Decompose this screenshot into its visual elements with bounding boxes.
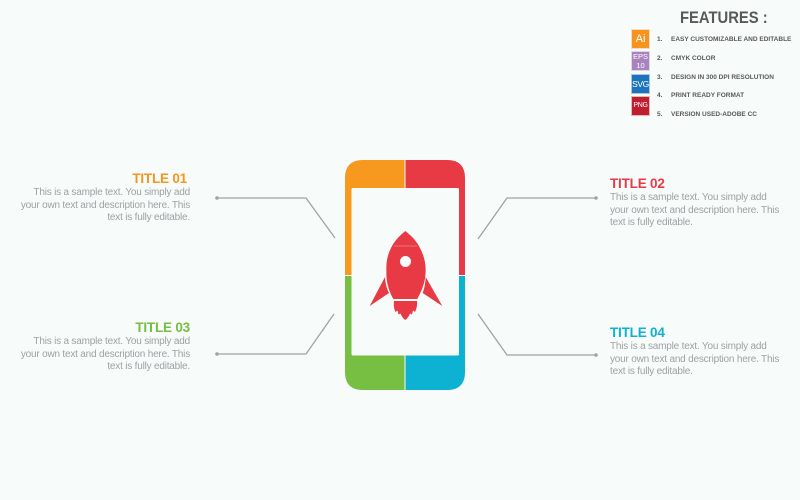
phone segment: red <box>406 160 465 275</box>
phone screen <box>352 188 459 356</box>
description 04: text is fully editable. <box>610 366 693 377</box>
feature 2: 2. <box>657 55 662 62</box>
description 02 <box>610 192 779 228</box>
description 01 <box>21 187 190 223</box>
description 03: your own text and description here. This <box>21 348 190 360</box>
description 01: This is a sample text. You simply add <box>33 187 190 198</box>
description 01: your own text and description here. This <box>21 200 190 210</box>
rocket window <box>400 256 411 267</box>
features heading: FEATURES : <box>680 8 768 27</box>
rocket right fin <box>423 277 442 306</box>
title 04: TITLE 04 <box>610 325 665 340</box>
phone segment: blue <box>406 276 465 390</box>
description 02: This is a sample text. You simply add <box>610 192 767 203</box>
description 03 <box>21 336 190 372</box>
icon: PNG format: PNG <box>633 102 648 109</box>
feature 4: PRINT READY FORMAT <box>671 92 744 99</box>
rocket left fin <box>370 277 389 306</box>
description 03: This is a sample text. You simply add <box>33 336 190 347</box>
feature 3: 3. <box>657 74 662 81</box>
icon: SVG format <box>631 74 650 94</box>
title 02: TITLE 02 <box>610 176 665 191</box>
description 02: your own text and description here. This <box>610 204 779 216</box>
feature 2: CMYK COLOR <box>671 55 715 62</box>
phone segment: green <box>345 276 404 390</box>
phone body <box>345 160 465 390</box>
description 04: This is a sample text. You simply add <box>610 341 767 352</box>
feature 1: EASY CUSTOMIZABLE AND EDITABLE <box>671 36 791 43</box>
feature 3: DESIGN IN 300 DPI RESOLUTION <box>671 74 774 81</box>
icon: Ai format <box>631 29 650 49</box>
title 03: TITLE 03 <box>135 320 190 335</box>
title 01: TITLE 01 <box>132 171 187 186</box>
icon: rocket <box>370 231 442 320</box>
phone segment: orange <box>345 160 404 275</box>
description 04: your own text and description here. This <box>610 354 779 364</box>
icon: SVG format: SVG <box>632 79 649 89</box>
feature 5: VERSION USED-ADOBE CC <box>671 111 757 118</box>
connector: title 02 <box>478 196 598 239</box>
icon: Ai format: Ai <box>636 33 645 45</box>
feature 5: 5. <box>657 111 662 118</box>
feature 1: 1. <box>657 36 662 43</box>
description 02: text is fully editable. <box>610 217 693 228</box>
description 01: text is fully editable. <box>107 212 190 223</box>
icon: EPS format: EPS <box>633 52 648 61</box>
feature 4: 4. <box>657 92 662 99</box>
connector: title 01 <box>215 196 335 238</box>
connector: title 04 <box>478 314 598 357</box>
connector: title 03 <box>215 314 334 356</box>
rocket nose seam <box>394 245 417 247</box>
description 03: text is fully editable. <box>107 361 190 372</box>
description 04 <box>610 341 779 377</box>
rocket flame <box>394 301 417 320</box>
rocket body <box>386 231 426 299</box>
icon: EPS format: 10 <box>636 60 645 70</box>
icon: PNG format <box>631 96 650 116</box>
icon: EPS format <box>631 51 650 71</box>
